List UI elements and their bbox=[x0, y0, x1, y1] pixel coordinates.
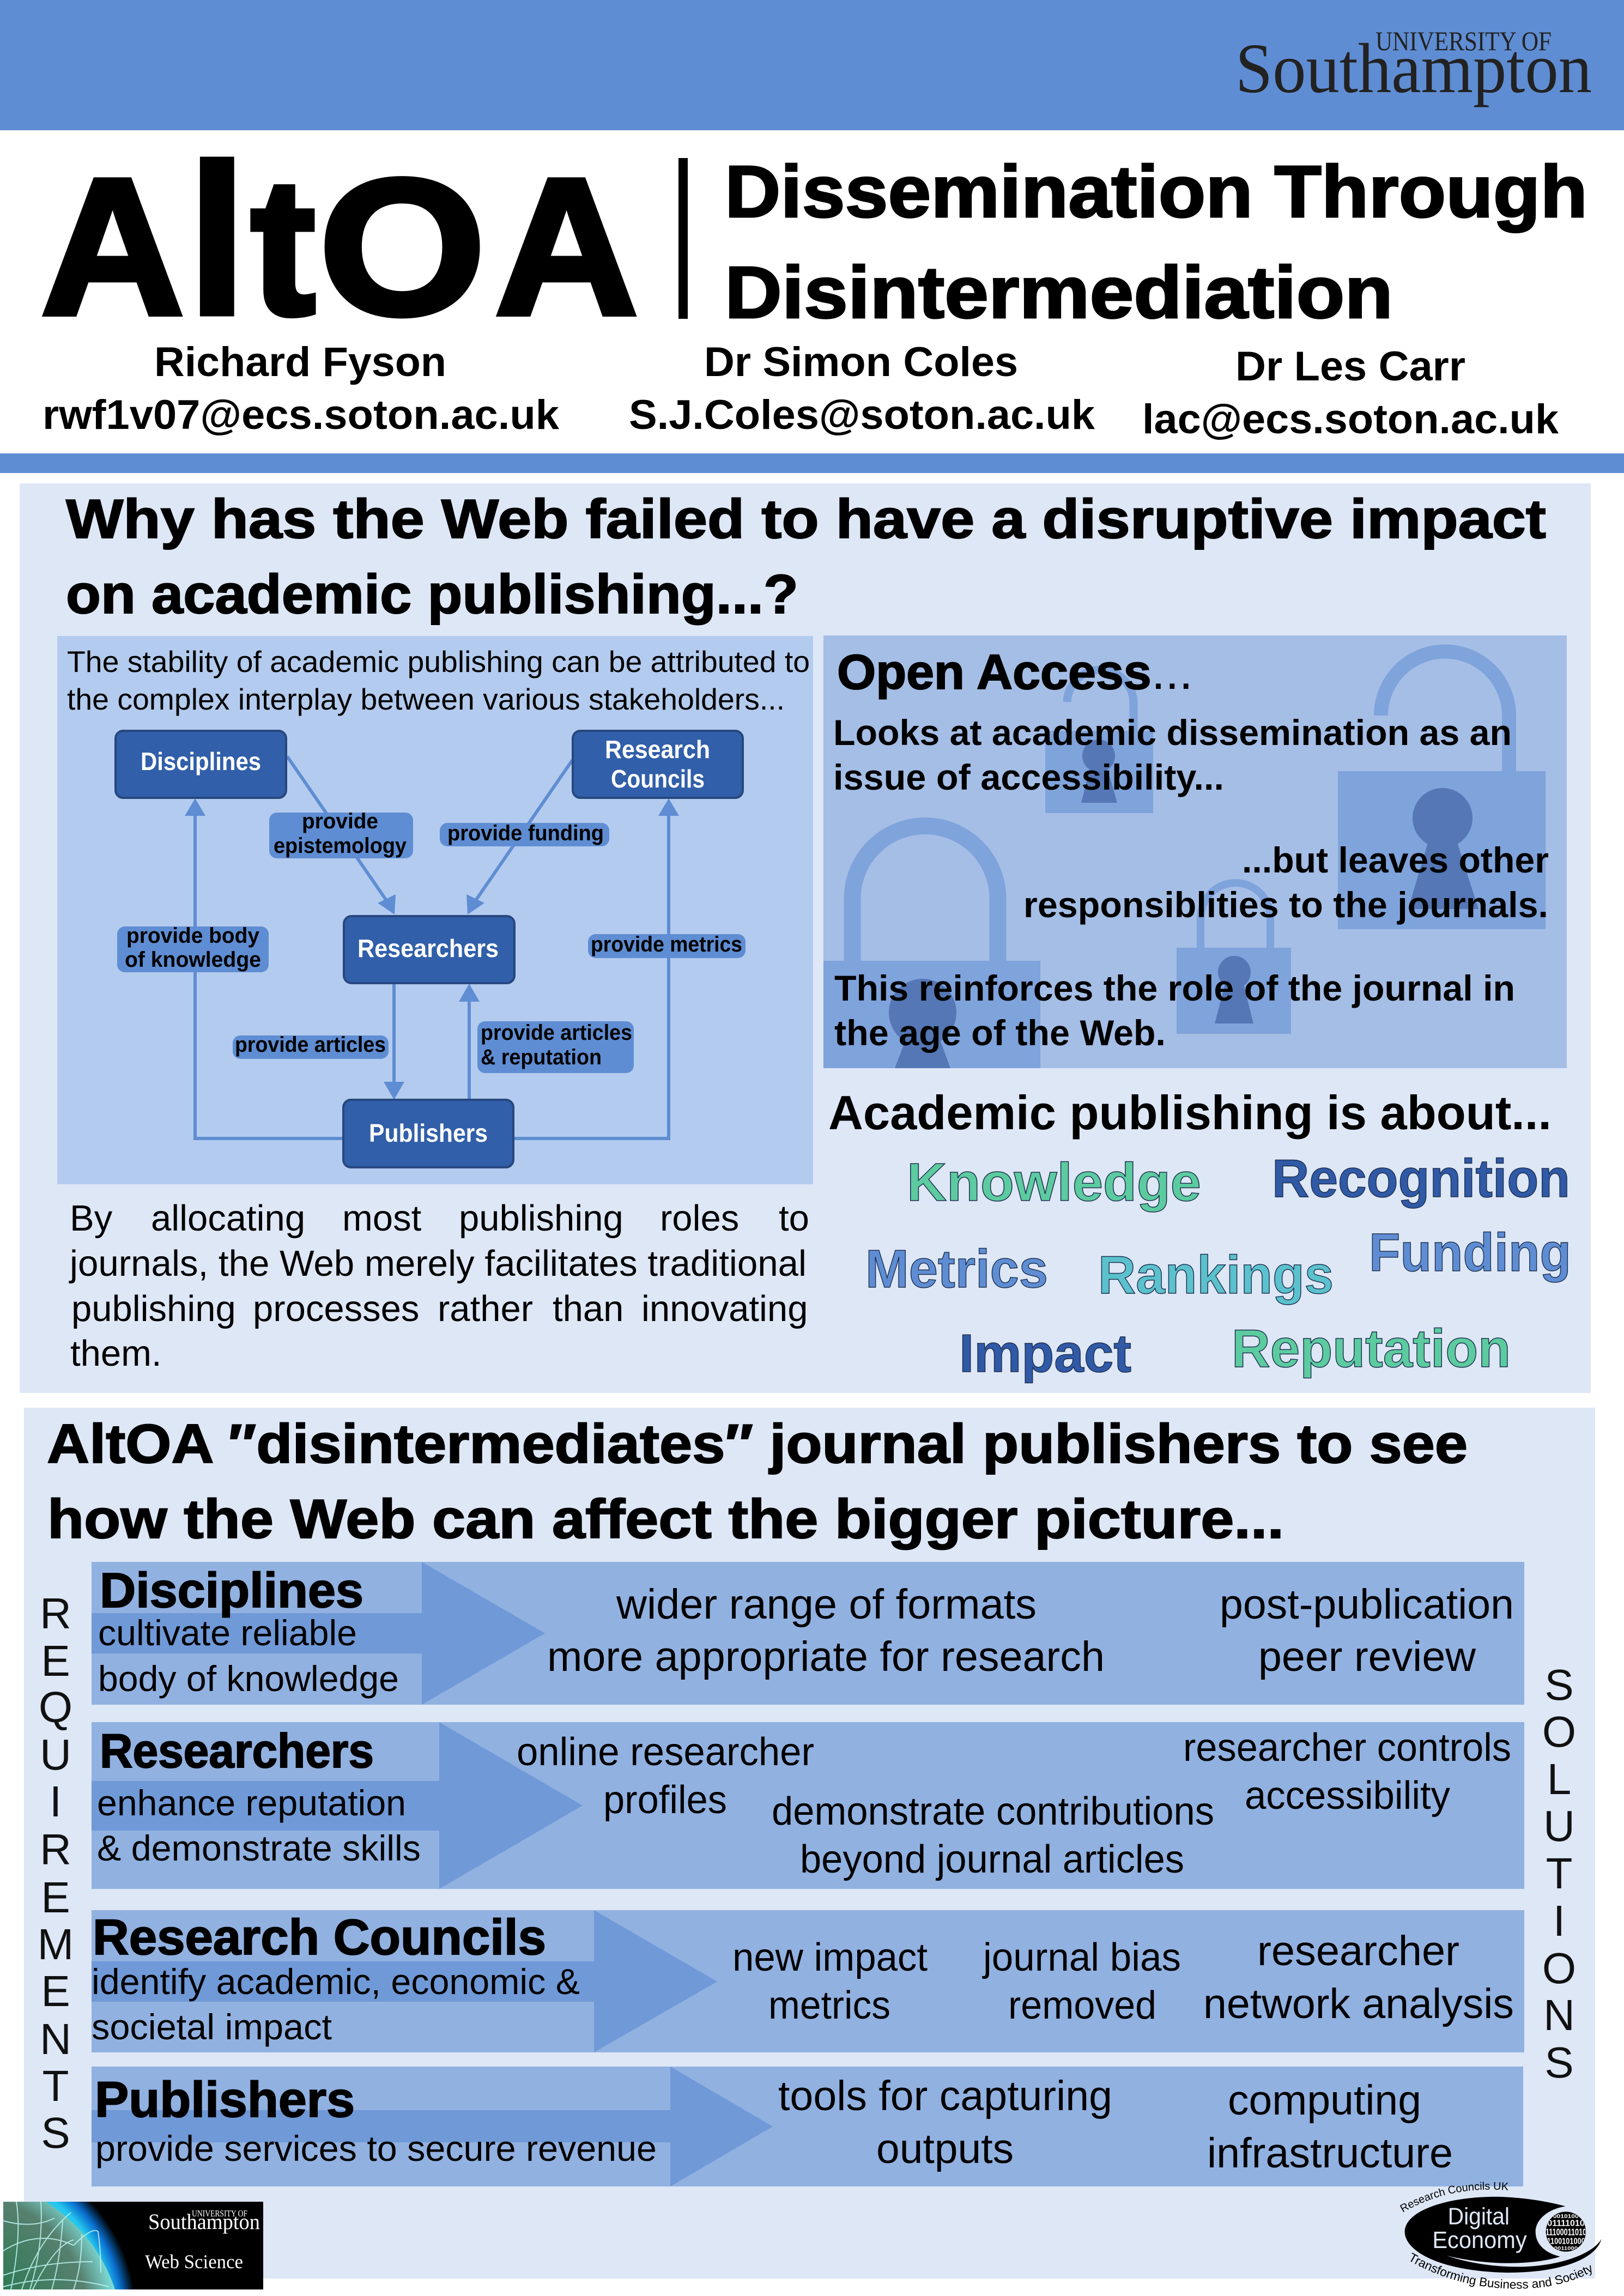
arrow: publishers to research councils bbox=[513, 798, 679, 1138]
solution: capturing tools: outputs bbox=[876, 2125, 1014, 2172]
icon: large closed padlock bbox=[823, 826, 1040, 1068]
paragraph: allocating publishing roles: most bbox=[342, 1198, 422, 1239]
solution: contributions: beyond journal articles bbox=[800, 1838, 1184, 1881]
vertical label: requirements: I bbox=[50, 1777, 62, 1826]
open access heading: Open Access... bbox=[837, 645, 1193, 700]
solution: infrastructure: infrastructure bbox=[1207, 2130, 1453, 2177]
paragraph: allocating publishing roles: processes bbox=[253, 1288, 419, 1329]
solution: accessibility: accessibility bbox=[1245, 1774, 1450, 1818]
label: provide articles and reputation bbox=[477, 1021, 634, 1073]
lower header band bbox=[0, 453, 1624, 473]
paragraph: allocating publishing roles: roles bbox=[660, 1198, 739, 1239]
logo: Digital Economy: 0010100 bbox=[1553, 2214, 1579, 2220]
node: Research Councils: Research bbox=[605, 735, 710, 764]
vertical label: requirements: E bbox=[41, 1967, 70, 2015]
paragraph: allocating publishing roles: journals, the Web merely facilitates traditional bbox=[69, 1243, 807, 1284]
label: provide articles and reputation: provide articles bbox=[481, 1021, 632, 1045]
paragraph: allocating publishing roles: to bbox=[779, 1198, 809, 1239]
panel heading: AltOA ″disintermediates″ journal publishers to see bbox=[47, 1414, 1468, 1475]
paragraph: allocating publishing roles: them. bbox=[70, 1333, 162, 1374]
diagram intro text: the complex interplay between various stakeholders... bbox=[67, 682, 785, 716]
logo: Southampton Web Science: UNIVERSITY OF bbox=[192, 2208, 247, 2219]
open access text: accessibility: issue of accessibility... bbox=[833, 757, 1224, 797]
logo: Digital Economy: Economy bbox=[1432, 2227, 1527, 2253]
label: provide body of knowledge bbox=[117, 924, 269, 972]
arrow: researchers to publishers bbox=[384, 983, 404, 1100]
vertical label: requirements: R bbox=[40, 1825, 71, 1874]
panel heading: on academic publishing...? bbox=[66, 564, 798, 625]
node: Disciplines bbox=[116, 731, 286, 798]
paragraph: allocating publishing roles: publishing bbox=[71, 1288, 236, 1329]
solution: infrastructure: computing bbox=[1228, 2077, 1421, 2124]
vertical label: solutions: U bbox=[1543, 1802, 1575, 1850]
arrow bbox=[92, 2067, 773, 2186]
node: Disciplines: Disciplines bbox=[141, 747, 261, 776]
word cloud: Recognition bbox=[1272, 1148, 1570, 1208]
word cloud: Metrics bbox=[865, 1239, 1048, 1299]
logo: Digital Economy: Digital bbox=[1448, 2204, 1510, 2230]
open access text: journal role: This reinforces the role of the journal in bbox=[834, 968, 1515, 1008]
vertical label: requirements: E bbox=[41, 1873, 70, 1922]
node: Researchers bbox=[344, 916, 514, 983]
open access text: journal role: the age of the Web. bbox=[834, 1013, 1166, 1053]
vertical label: requirements: E bbox=[41, 1637, 70, 1685]
logo: Southampton Web Science: Web Science bbox=[145, 2251, 243, 2273]
open access text: accessibility: Looks at academic dissemination as an bbox=[833, 712, 1512, 753]
logo: Digital Economy: 11100011010 bbox=[1546, 2227, 1586, 2238]
solution: infrastructure bbox=[1207, 2077, 1453, 2177]
word cloud: Rankings bbox=[1098, 1245, 1334, 1305]
header band bbox=[0, 0, 1624, 130]
arrow: publishers to researchers bbox=[459, 984, 480, 1100]
arrow: disciplines to researchers bbox=[287, 756, 396, 914]
paragraph: allocating publishing roles: By bbox=[70, 1198, 113, 1239]
solution: formats: wider range of formats bbox=[616, 1581, 1037, 1628]
vertical label: solutions: N bbox=[1543, 1991, 1575, 2039]
label: provide epistemology: provide bbox=[302, 809, 378, 833]
logo: Digital Economy: Research Councils UK bbox=[1399, 2182, 1508, 2213]
requirement: cultivate reliable bbox=[98, 1613, 357, 1653]
node: Research Councils bbox=[573, 731, 743, 798]
author: Dr Simon Coles bbox=[629, 339, 1095, 438]
open access text: accessibility bbox=[833, 712, 1512, 797]
vertical label: requirements: U bbox=[40, 1730, 71, 1779]
open access text: journal role bbox=[834, 968, 1515, 1053]
solution: impact metrics bbox=[732, 1936, 928, 2027]
node: Researchers: Researchers bbox=[357, 934, 499, 962]
arrow: research councils to researchers bbox=[466, 760, 572, 914]
node: Publishers: Publishers bbox=[369, 1119, 488, 1147]
row: publishers bbox=[92, 2067, 1523, 2186]
solution: profiles: online researcher bbox=[517, 1730, 814, 1774]
paragraph: allocating publishing roles: rather bbox=[438, 1288, 533, 1329]
label: provide metrics: provide metrics bbox=[591, 932, 742, 956]
requirement bbox=[92, 1910, 580, 2047]
word cloud: Reputation bbox=[1232, 1318, 1511, 1378]
paragraph: allocating publishing roles: allocating bbox=[151, 1198, 305, 1239]
vertical label: requirements: M bbox=[38, 1920, 74, 1968]
author: Dr Simon Coles: Dr Simon Coles bbox=[704, 339, 1018, 385]
solution: peer review: peer review bbox=[1258, 1633, 1476, 1680]
solution: network analysis bbox=[1203, 1928, 1514, 2027]
author: Dr Les Carr bbox=[1142, 343, 1559, 443]
title: AltOA: l bbox=[187, 121, 247, 360]
author: Richard Fyson: Richard Fyson bbox=[154, 339, 446, 385]
panel: open access bbox=[823, 635, 1567, 1068]
icon: small open padlock bbox=[1045, 670, 1153, 813]
label: provide epistemology: epistemology bbox=[274, 834, 407, 858]
requirement: Disciplines bbox=[100, 1564, 363, 1618]
solution: journal bias bbox=[982, 1936, 1181, 2027]
logo: University of Southampton: Southampton bbox=[1235, 29, 1592, 108]
vertical label: requirements: Q bbox=[39, 1683, 72, 1731]
title: AltOA bbox=[41, 121, 638, 360]
solution: journal bias: journal bias bbox=[982, 1936, 1181, 1979]
solution: formats bbox=[547, 1581, 1105, 1680]
requirement: Research Councils bbox=[93, 1910, 546, 1965]
panel: why has the web failed bbox=[20, 483, 1591, 1393]
solution: accessibility: researcher controls bbox=[1183, 1726, 1511, 1770]
vertical label: requirements: T bbox=[43, 2062, 69, 2110]
requirement bbox=[98, 1564, 399, 1699]
requirement: identify academic, economic & bbox=[92, 1961, 580, 2002]
label: provide body of knowledge: provide body bbox=[126, 924, 260, 948]
vertical label: requirements: S bbox=[41, 2109, 70, 2157]
vertical label: requirements bbox=[38, 1589, 74, 2157]
logo: Digital Economy: 1100101000 bbox=[1547, 2237, 1585, 2246]
title: AltOA: t bbox=[251, 138, 316, 355]
subtitle bbox=[725, 150, 1587, 334]
solution: impact metrics: new impact bbox=[732, 1936, 928, 1979]
vertical label: solutions: S bbox=[1544, 2038, 1574, 2087]
open access text: responsibilities: ...but leaves other bbox=[1242, 840, 1549, 880]
vertical label: solutions: T bbox=[1546, 1849, 1572, 1898]
label: provide articles: provide articles bbox=[235, 1033, 386, 1057]
solution: peer review: post-publication bbox=[1220, 1581, 1514, 1628]
vertical label: requirements: N bbox=[40, 2015, 71, 2063]
title: AltOA: A bbox=[41, 138, 184, 355]
label: provide articles and reputation: & reputation bbox=[481, 1045, 602, 1069]
arrow bbox=[92, 1910, 717, 2052]
solution: contributions: demonstrate contributions bbox=[772, 1790, 1214, 1833]
vertical label: solutions: O bbox=[1542, 1707, 1576, 1756]
panel heading bbox=[66, 489, 1546, 625]
requirement bbox=[97, 1724, 421, 1868]
paragraph: allocating publishing roles: than bbox=[553, 1288, 623, 1329]
logo: Southampton Web Science: Southampton bbox=[148, 2209, 260, 2234]
title: AltOA: A bbox=[495, 138, 638, 355]
solution: accessibility bbox=[1183, 1726, 1511, 1818]
author: Dr Les Carr: lac@ecs.soton.ac.uk bbox=[1142, 396, 1559, 443]
requirement: body of knowledge bbox=[98, 1658, 399, 1699]
node: Research Councils: Councils bbox=[611, 765, 705, 793]
logo: Digital Economy bbox=[1399, 2182, 1602, 2289]
paragraph: allocating publishing roles: publishing bbox=[459, 1198, 623, 1239]
word cloud: Funding bbox=[1369, 1222, 1571, 1282]
arrow bbox=[92, 1562, 545, 1705]
label: provide funding: provide funding bbox=[447, 821, 604, 845]
word cloud: Knowledge bbox=[907, 1152, 1201, 1212]
requirement bbox=[95, 2072, 657, 2168]
panel heading bbox=[47, 1414, 1468, 1550]
diagram intro text: The stability of academic publishing can be attributed to bbox=[67, 645, 810, 678]
solution: peer review bbox=[1220, 1581, 1514, 1680]
solution: formats: more appropriate for research bbox=[547, 1633, 1105, 1680]
author: Dr Simon Coles: S.J.Coles@soton.ac.uk bbox=[629, 392, 1095, 438]
logo: Digital Economy: 01111010 bbox=[1547, 2219, 1585, 2228]
vertical label: solutions: I bbox=[1553, 1897, 1565, 1945]
solution: network analysis: network analysis bbox=[1203, 1980, 1514, 2027]
paragraph: allocating publishing roles bbox=[69, 1198, 809, 1374]
open access text: responsibilities: responsiblities to the journals. bbox=[1023, 885, 1548, 925]
solution: capturing tools bbox=[778, 2073, 1112, 2172]
vertical label: solutions: S bbox=[1544, 1661, 1574, 1709]
vertical label: solutions bbox=[1542, 1661, 1576, 2087]
solution: profiles bbox=[517, 1730, 814, 1822]
heading: academic publishing is about: Academic publishing is about... bbox=[828, 1086, 1552, 1140]
solution: journal bias: removed bbox=[1008, 1984, 1156, 2027]
solution: impact metrics: metrics bbox=[768, 1984, 890, 2027]
panel heading: how the Web can affect the bigger picture... bbox=[47, 1489, 1284, 1550]
label: provide body of knowledge: of knowledge bbox=[125, 948, 261, 972]
requirement: Researchers bbox=[100, 1724, 374, 1778]
word cloud: Impact bbox=[959, 1323, 1131, 1383]
requirement: provide services to secure revenue bbox=[95, 2128, 657, 2168]
requirement: Publishers bbox=[95, 2072, 355, 2128]
label: provide epistemology bbox=[269, 809, 413, 858]
logo: Southampton Web Science bbox=[3, 2202, 263, 2289]
requirement: & demonstrate skills bbox=[97, 1828, 421, 1868]
row: researchers bbox=[92, 1722, 1524, 1889]
icon: large open padlock bbox=[1338, 652, 1546, 929]
logo: University of Southampton: UNIVERSITY OF bbox=[1375, 26, 1552, 56]
solution: capturing tools: tools for capturing bbox=[778, 2073, 1112, 2119]
icon: small closed padlock bbox=[1177, 883, 1291, 1034]
node: Publishers bbox=[343, 1100, 513, 1167]
title: AltOA: O bbox=[319, 139, 486, 355]
word cloud bbox=[865, 1148, 1571, 1383]
author: Richard Fyson bbox=[43, 339, 560, 438]
subtitle: Disintermediation bbox=[725, 251, 1393, 334]
open access text: responsibilities bbox=[1023, 840, 1549, 925]
author: Richard Fyson: rwf1v07@ecs.soton.ac.uk bbox=[43, 392, 560, 438]
panel: stakeholder diagram bbox=[57, 636, 813, 1184]
requirement: societal impact bbox=[92, 2007, 332, 2047]
author: Dr Les Carr: Dr Les Carr bbox=[1235, 343, 1465, 390]
arrow bbox=[92, 1722, 583, 1889]
solution: contributions bbox=[772, 1790, 1214, 1881]
panel heading: Why has the Web failed to have a disruptive impact bbox=[66, 489, 1546, 550]
requirement: enhance reputation bbox=[97, 1783, 406, 1823]
logo: Digital Economy: 0011000 bbox=[1554, 2245, 1578, 2251]
vertical label: solutions: L bbox=[1547, 1755, 1571, 1803]
solution: profiles: profiles bbox=[603, 1778, 727, 1822]
title divider bbox=[678, 158, 688, 319]
vertical label: requirements: R bbox=[40, 1589, 71, 1638]
panel: AltOA disintermediates bbox=[24, 1408, 1595, 2279]
subtitle: Dissemination Through bbox=[725, 150, 1587, 233]
row: disciplines bbox=[92, 1562, 1524, 1705]
solution: network analysis: researcher bbox=[1257, 1928, 1459, 1974]
vertical label: solutions: O bbox=[1542, 1944, 1576, 1992]
logo: Digital Economy: Transforming Business and Society bbox=[1410, 2252, 1592, 2289]
row: research councils bbox=[92, 1910, 1524, 2052]
arrow: publishers to disciplines bbox=[185, 798, 344, 1138]
diagram intro text bbox=[67, 645, 810, 716]
paragraph: allocating publishing roles: innovating bbox=[641, 1288, 808, 1329]
